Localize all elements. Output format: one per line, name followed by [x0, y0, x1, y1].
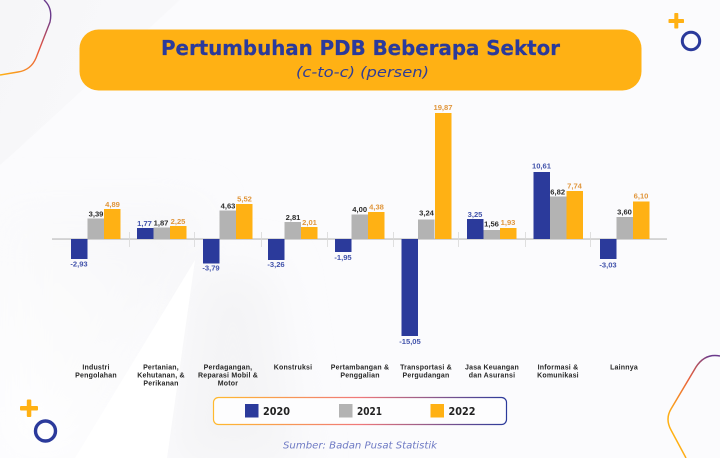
bars: Informasi: 7,74: [567, 182, 583, 190]
category labels: Motor: [218, 380, 238, 388]
bars: Pertambangan: 4,38: [369, 202, 384, 212]
bars: Pertanian: 2,25: [171, 217, 186, 226]
bars: Perdagangan: -3,79: [202, 264, 220, 272]
bars: Lainnya: -3,03: [599, 260, 617, 270]
category labels: Konstruksi: [274, 364, 312, 372]
category labels: Penggalian: [340, 372, 380, 380]
bars: Transportasi: 19,87: [433, 103, 453, 112]
bars: Jasa Keuangan: [467, 210, 516, 239]
bars: Pertambangan: -1,95: [334, 253, 352, 262]
bars: Transportasi: [399, 103, 453, 346]
category labels: Transportasi &: [400, 364, 452, 372]
bars: Pertambangan: [334, 202, 384, 262]
bars: Jasa Keuangan: 3,25: [468, 210, 483, 219]
decorative outline: bottom right: [668, 355, 720, 458]
bars: Pertanian: 1,77: [137, 219, 152, 228]
bars: Perdagangan: 5,52: [237, 194, 252, 204]
category labels: Pertambangan &: [331, 364, 389, 372]
bars: Industri Pengolahan: 4,89: [105, 200, 120, 209]
bars: Jasa Keuangan: 1,93: [501, 218, 515, 227]
bars: Perdagangan: [202, 194, 252, 272]
category labels: Perdagangan,: [204, 364, 252, 372]
category labels: Pertanian,: [143, 364, 179, 372]
decorative outline: top left: [0, 0, 51, 75]
category labels: dan Asuransi: [469, 372, 515, 380]
bars: Informasi: 10,61: [532, 162, 552, 170]
legend: 2022: [448, 406, 476, 418]
bars: Pertanian: 1,87: [154, 218, 168, 228]
subtitle: (c-to-c) (persen): [296, 65, 429, 81]
bars: Transportasi: -15,05: [399, 337, 422, 346]
category labels: Industri: [82, 364, 110, 372]
category labels: Perikanan: [143, 380, 179, 388]
category labels: Informasi &: [538, 364, 578, 372]
category labels: Pergudangan: [403, 372, 449, 380]
bars: Lainnya: 3,60: [617, 208, 632, 216]
category labels: Komunikasi: [537, 372, 579, 380]
bars: Konstruksi: -3,26: [267, 260, 285, 269]
bars: Informasi: 6,82: [550, 188, 565, 196]
category labels: Jasa Keuangan: [465, 364, 519, 372]
icon: plus and ring bottom left: [20, 400, 56, 441]
bars: Lainnya: 6,10: [634, 192, 648, 200]
bars: Lainnya: [599, 192, 650, 270]
category labels: Reparasi Mobil &: [198, 372, 258, 380]
bars: Perdagangan: 4,63: [221, 202, 235, 210]
bars: Jasa Keuangan: 1,56: [484, 220, 499, 228]
bars: Industri Pengolahan: [70, 200, 120, 268]
title: Pertumbuhan PDB Beberapa Sektor: [161, 36, 561, 60]
axis baseline: [52, 232, 667, 247]
category labels: Kehutanan, &: [137, 372, 185, 380]
legend: 2021: [357, 406, 382, 418]
bars: Industri Pengolahan: 3,39: [89, 210, 103, 218]
bars: Informasi: [532, 162, 583, 239]
category labels: Pengolahan: [75, 372, 117, 380]
bars: Konstruksi: 2,01: [302, 218, 318, 227]
category labels: [75, 364, 638, 388]
bars: Konstruksi: [267, 213, 318, 269]
title banner: [80, 30, 642, 90]
bars: Pertanian: [137, 217, 186, 239]
legend: 2020: [263, 406, 290, 418]
category labels: Lainnya: [610, 364, 638, 372]
bars: Transportasi: 3,24: [419, 208, 435, 218]
bars: Konstruksi: 2,81: [286, 213, 301, 222]
bars: Pertambangan: 4,00: [352, 205, 367, 214]
icon: plus and ring top right: [668, 13, 700, 50]
legend: [214, 398, 506, 424]
source note: Sumber: Badan Pusat Statistik: [283, 440, 438, 452]
bars: Industri Pengolahan: -2,93: [70, 260, 88, 268]
